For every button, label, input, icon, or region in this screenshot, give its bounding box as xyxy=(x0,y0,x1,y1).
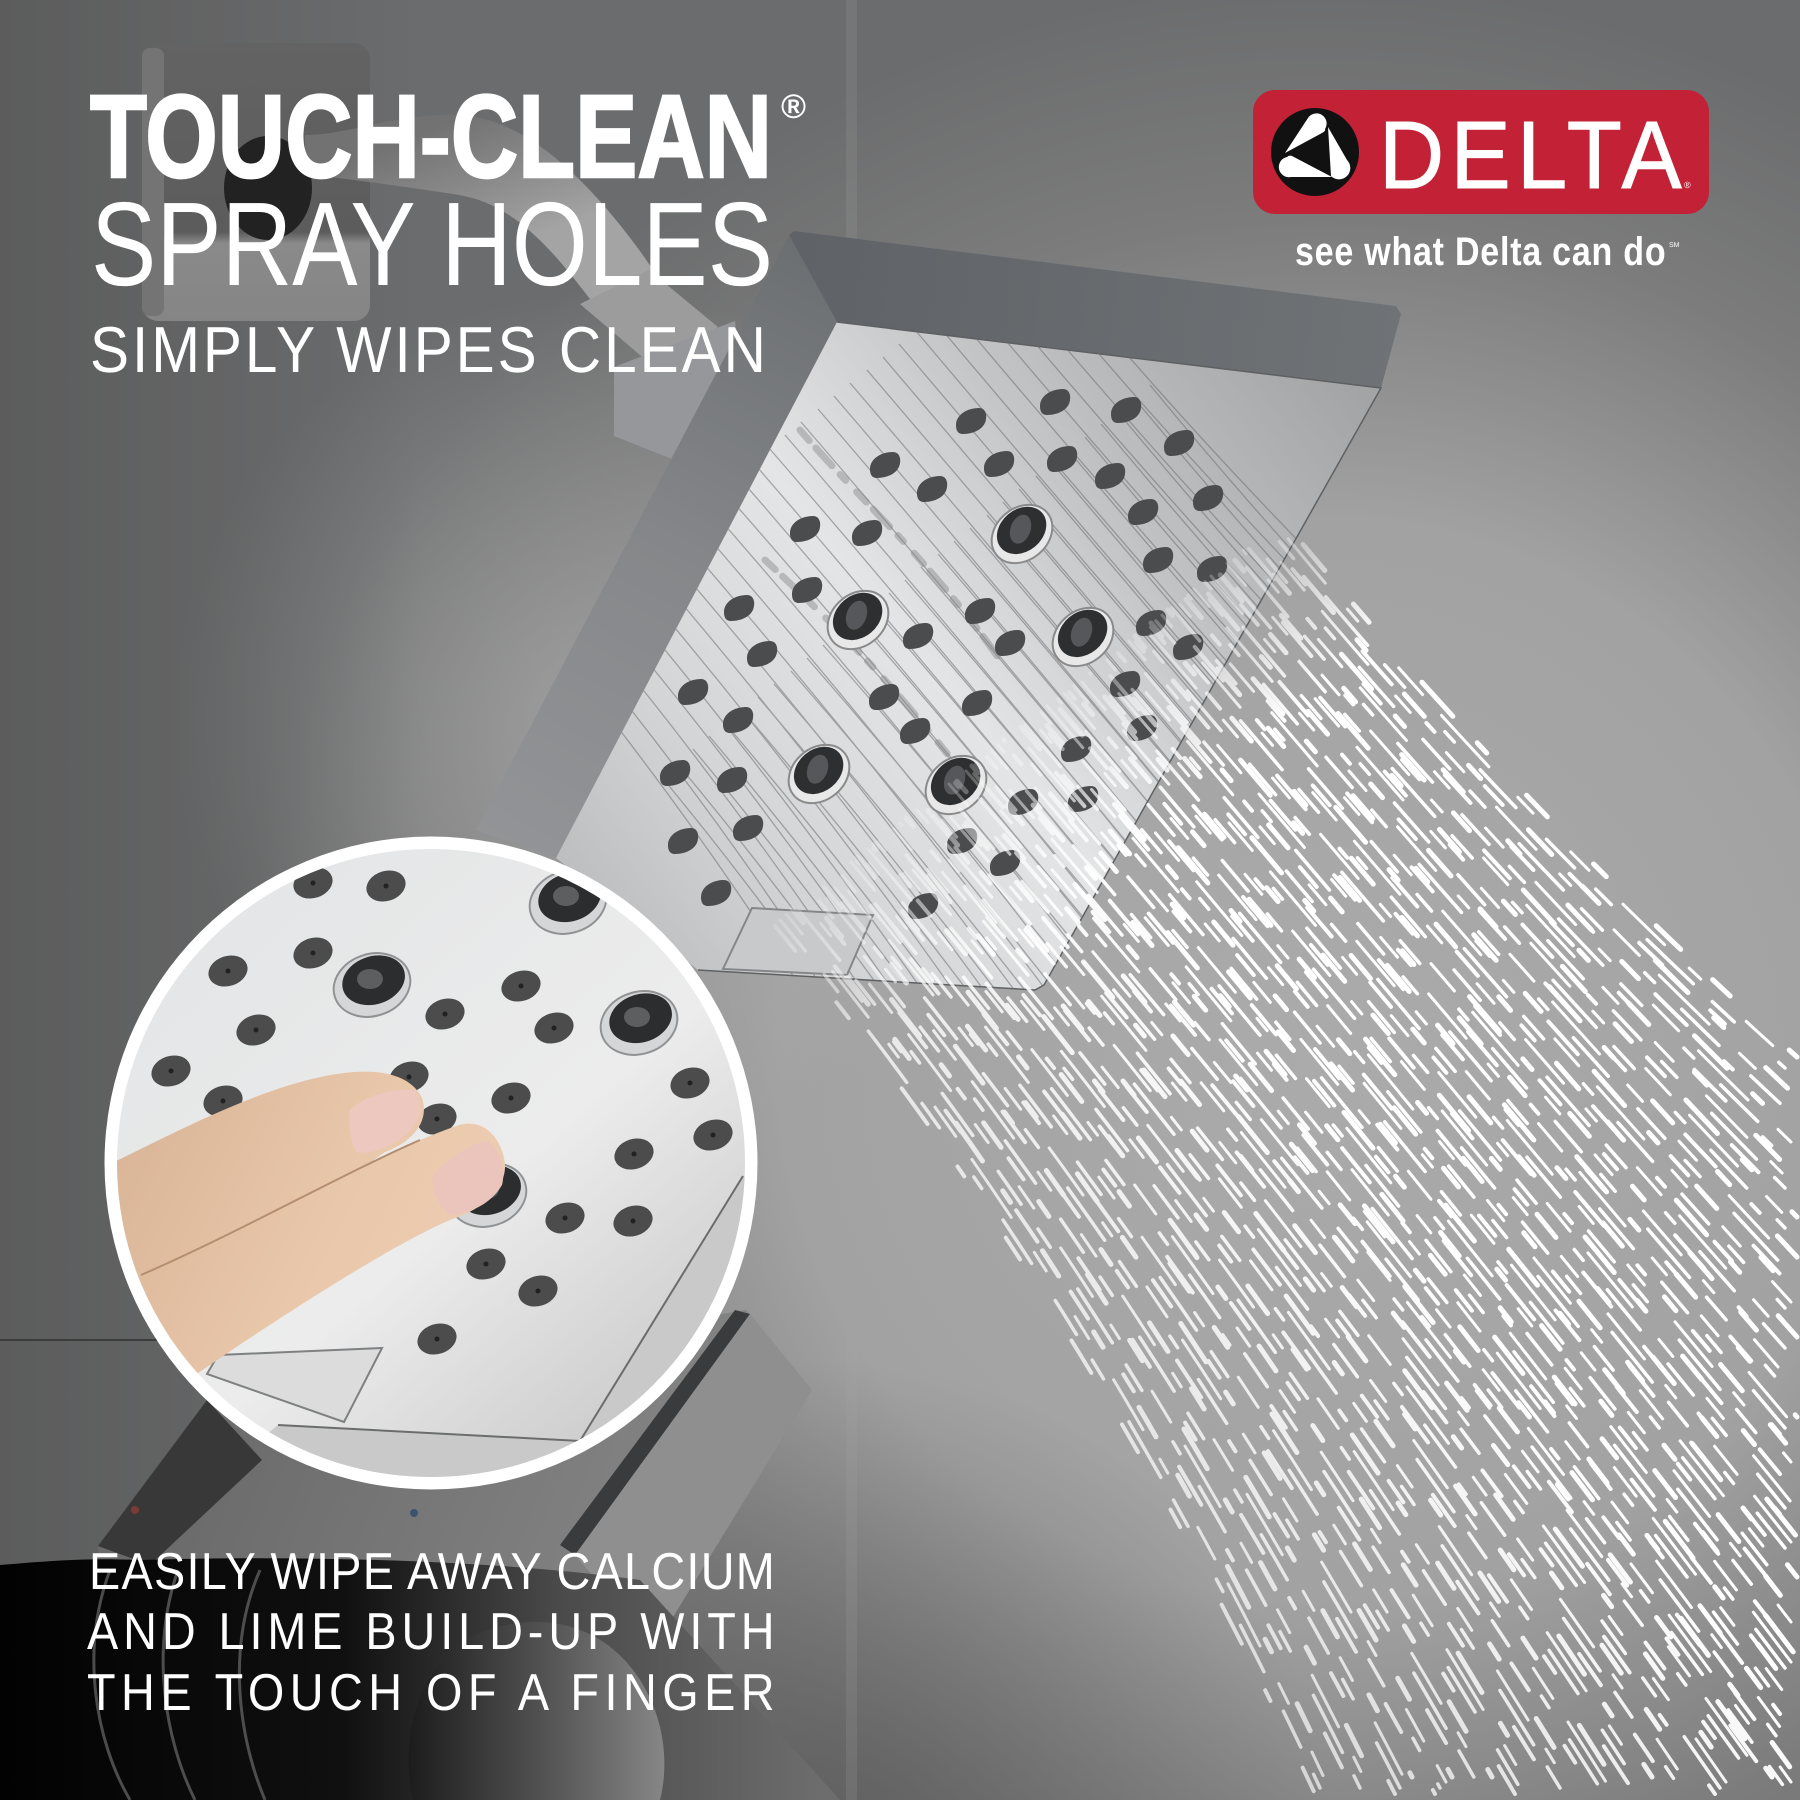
brand tagline: see what Delta can do xyxy=(1295,230,1666,274)
cold indicator dot xyxy=(410,1509,418,1517)
red badge xyxy=(1253,90,1709,214)
bottom description text: EASILY WIPE AWAY CALCIUM xyxy=(89,1543,775,1601)
finger crease xyxy=(141,1140,420,1275)
flange left edge xyxy=(142,48,164,316)
head top panel xyxy=(789,231,1401,388)
water ripples on face xyxy=(765,430,1000,770)
upper finger xyxy=(110,1072,424,1310)
shower head xyxy=(519,231,1401,991)
wordmark registered mark: ® xyxy=(1684,180,1691,190)
face rim xyxy=(698,322,1381,990)
bottom description text xyxy=(87,1543,775,1722)
lower notch xyxy=(207,1348,382,1422)
white ring xyxy=(104,836,758,1490)
face notch xyxy=(723,908,873,975)
right dark strip xyxy=(560,1310,750,1555)
title line 1: TOUCH-CLEAN xyxy=(90,71,772,203)
nozzles xyxy=(147,860,737,1359)
arm socket reflection xyxy=(224,136,312,240)
arm bracket xyxy=(614,321,740,459)
title block xyxy=(90,71,806,386)
magnified face xyxy=(105,837,760,1491)
head spray face xyxy=(556,322,1381,990)
spray nozzles xyxy=(660,389,1227,919)
magnified detail circle xyxy=(104,836,760,1491)
water spray streaks xyxy=(775,519,1797,1794)
thin water jets on face xyxy=(622,332,1296,988)
dark valve body xyxy=(0,1558,840,1800)
triangle blades xyxy=(1279,113,1350,179)
Delta logo xyxy=(1253,90,1709,214)
right facet xyxy=(575,1314,812,1648)
tagline: SIMPLY WIPES CLEAN xyxy=(90,313,766,386)
left dark edge xyxy=(98,1400,262,1565)
lower finger xyxy=(138,1124,505,1374)
wall flange xyxy=(142,43,370,321)
hot indicator dot xyxy=(131,1506,139,1514)
threaded collar xyxy=(580,270,718,367)
title line 2: SPRAY HOLES xyxy=(91,178,773,311)
shower valve trim below the circle xyxy=(0,1310,840,1800)
lower strip under face xyxy=(270,1177,744,1477)
head side panel xyxy=(476,235,837,858)
registered mark: ® xyxy=(781,88,806,126)
wordmark: DELTA xyxy=(1379,102,1682,209)
description line 3: THE TOUCH OF A FINGER xyxy=(87,1664,775,1722)
chrome rings xyxy=(94,1570,265,1800)
service mark: SM xyxy=(1669,242,1680,249)
lower nail xyxy=(432,1141,503,1215)
handle xyxy=(408,1622,664,1800)
shower arm and wall flange xyxy=(142,43,740,459)
trim plate xyxy=(98,1310,812,1648)
curved arm xyxy=(305,115,660,312)
upper nail xyxy=(349,1090,420,1153)
black circle xyxy=(1271,108,1359,196)
description line 2: AND LIME BUILD-UP WITH xyxy=(87,1603,775,1661)
